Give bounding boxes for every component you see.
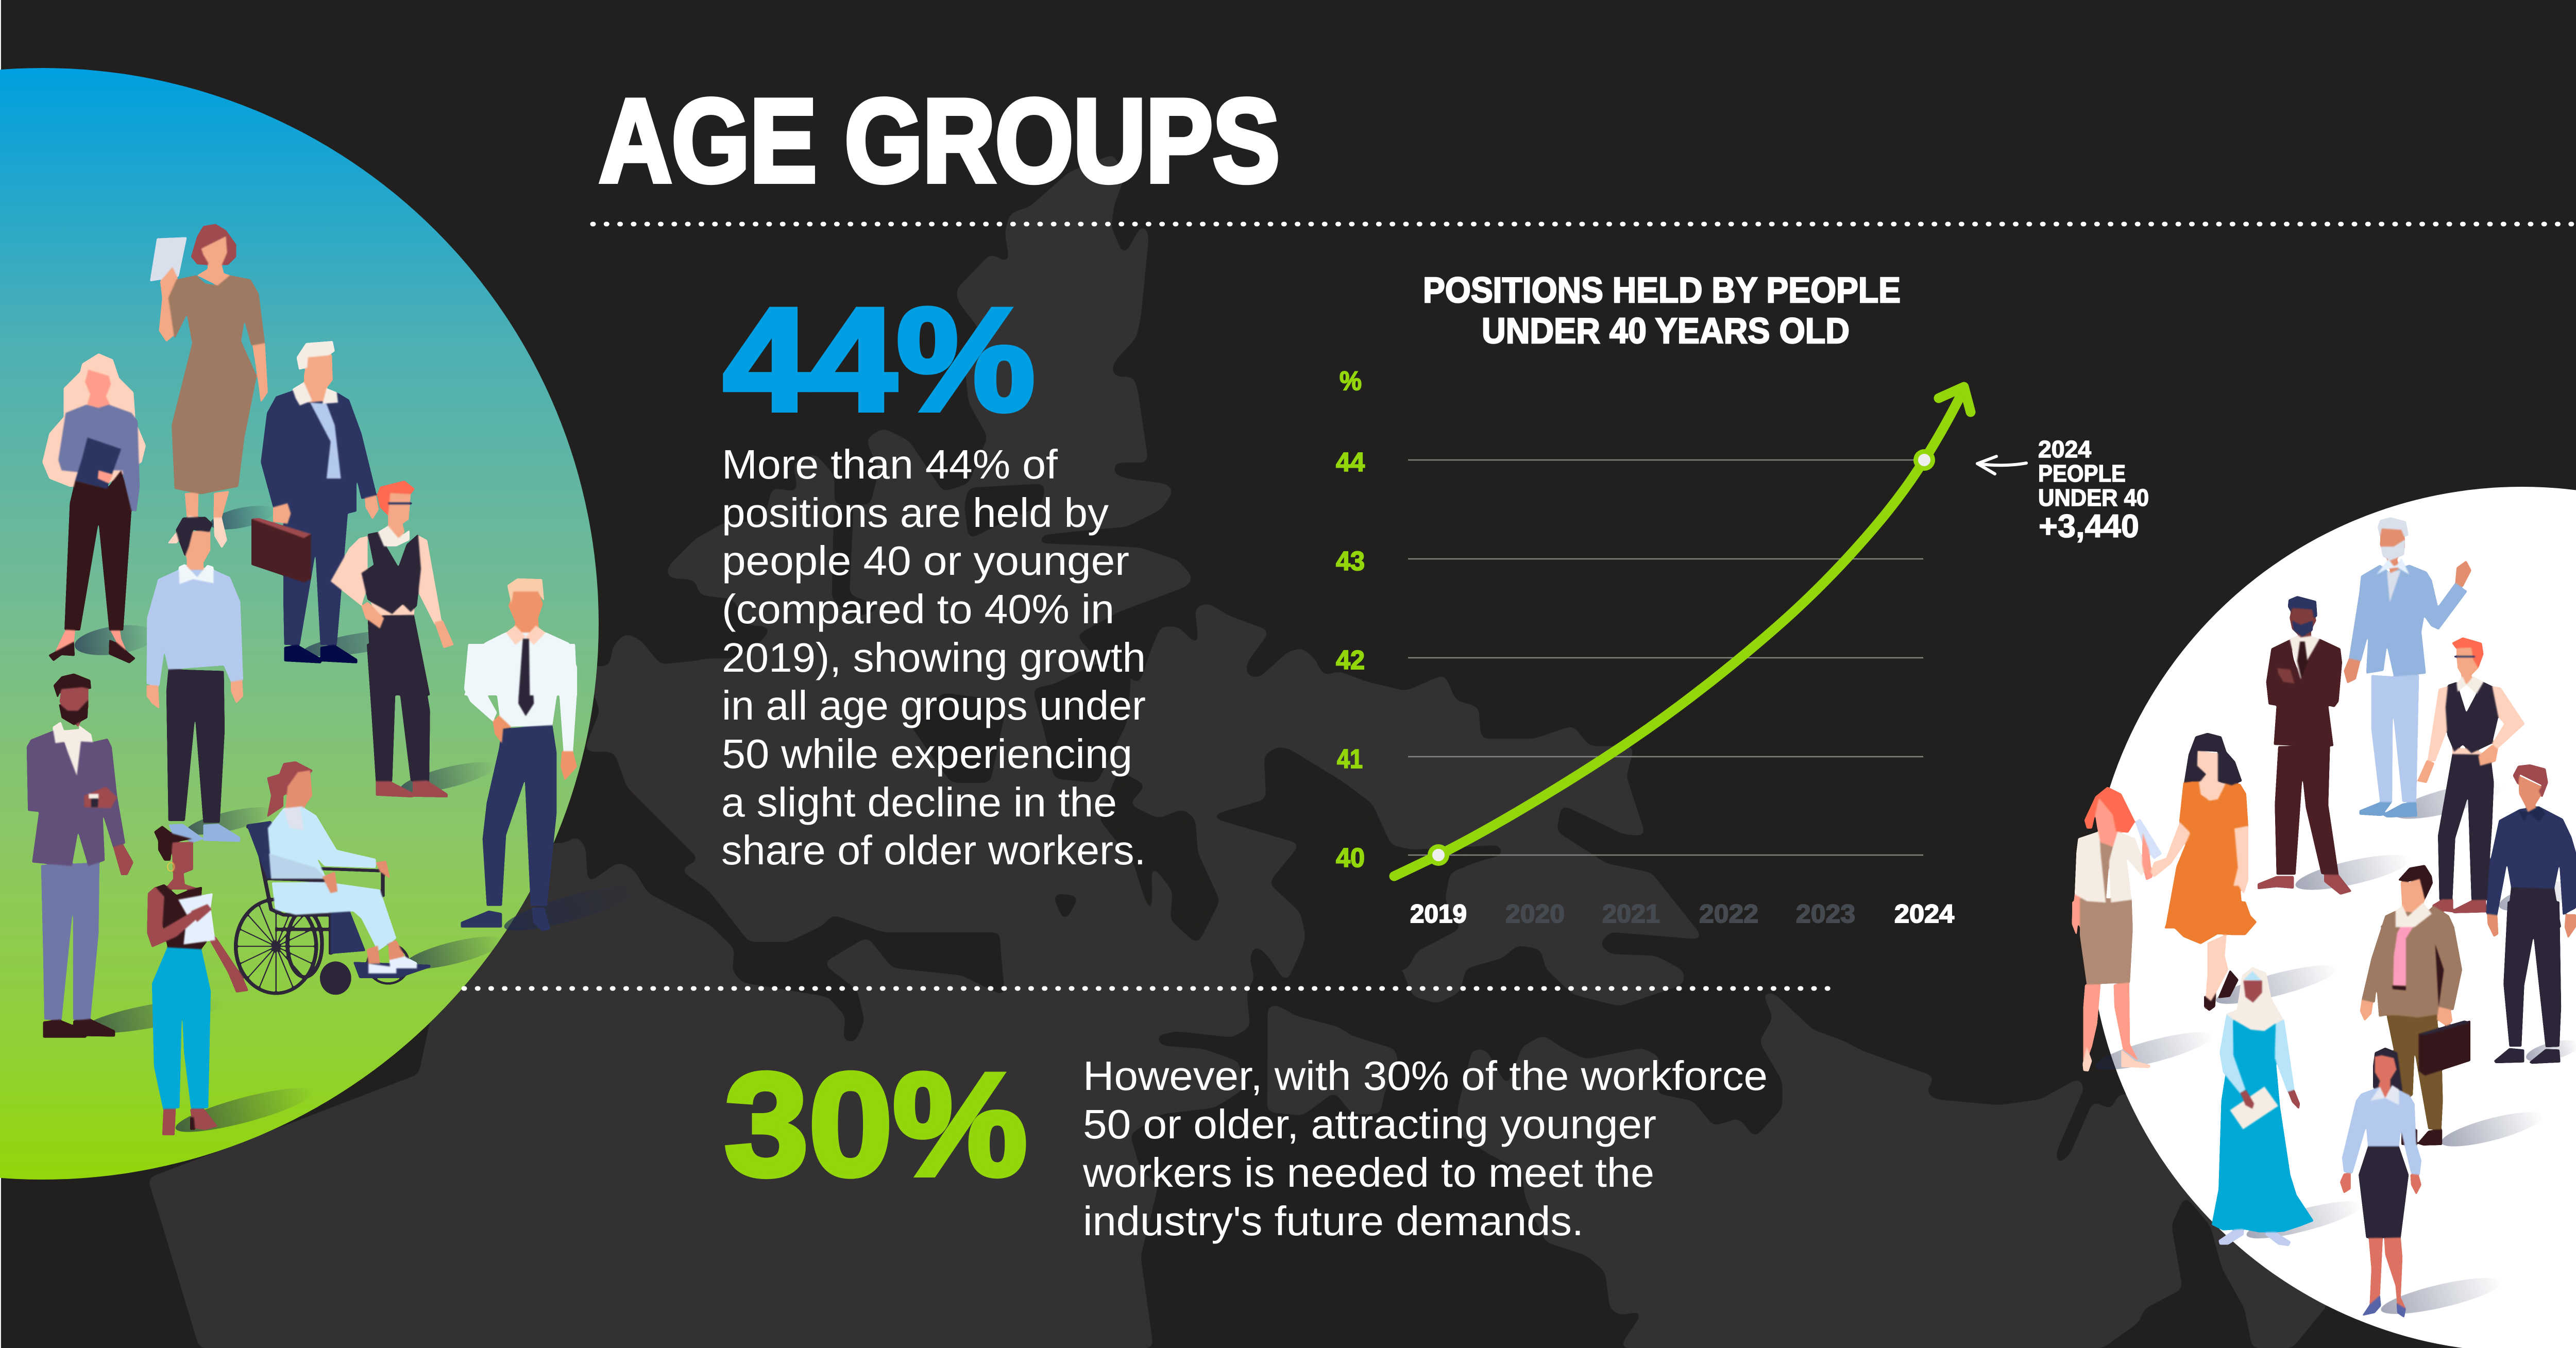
data point 2019 bbox=[1428, 844, 1449, 866]
right ground shadows bbox=[2091, 775, 2576, 1321]
figure: man in light blue sweater bbox=[147, 517, 243, 843]
gradient circle panel bbox=[0, 68, 599, 1180]
figure: blond man in white shirt and tie bbox=[461, 578, 577, 931]
figure: white-haired man in navy suit with briefcase bbox=[251, 341, 379, 663]
text block: 44% description: positions are held by bbox=[722, 490, 1109, 536]
text block: 30% description bbox=[1082, 1053, 1768, 1244]
figure: man in navy shirt bbox=[2486, 764, 2576, 1064]
chart title: UNDER 40 YEARS OLD bbox=[1482, 311, 1850, 351]
y axis labels: 42 bbox=[1336, 645, 1365, 675]
arrow to annotation bbox=[1977, 456, 2026, 474]
year labels: 2024 bbox=[1894, 899, 1954, 928]
text block: 44% description bbox=[721, 441, 1146, 873]
text block: 44% description: (compared to 40% in bbox=[722, 586, 1114, 632]
text block: 44% description: More than 44% of bbox=[722, 441, 1058, 487]
people group: left circle bbox=[27, 224, 577, 1135]
y axis labels: 41 bbox=[1337, 744, 1363, 774]
year labels: 2022 bbox=[1699, 899, 1758, 928]
figure: man in brown jacket with briefcase bbox=[2360, 865, 2470, 1146]
chart title: POSITIONS HELD BY PEOPLE bbox=[1423, 270, 1901, 310]
annotation: 2024 people under 40 bbox=[2038, 436, 2149, 544]
y axis labels: 40 bbox=[1336, 843, 1365, 873]
figure: woman in wheelchair bbox=[236, 761, 430, 995]
text block: 30% description: However, with 30% of the workforce bbox=[1083, 1053, 1768, 1099]
growth curve arrow bbox=[1394, 387, 1971, 876]
figure: blonde woman with folder bbox=[42, 353, 146, 663]
text block: 44% description: 2019), showing growth bbox=[722, 635, 1146, 680]
figure: woman in orange dress bbox=[2150, 733, 2257, 1011]
text block: 44% description: people 40 or younger bbox=[722, 538, 1129, 584]
left edge strip bbox=[0, 0, 1, 1348]
figure: red-haired man in vest bbox=[2417, 637, 2525, 913]
lower dotted divider bbox=[464, 986, 1832, 991]
figure: red-haired man in vest bbox=[331, 481, 454, 797]
figure: bearded man in purple suit bbox=[27, 674, 133, 1038]
figure: woman in hijab and blue dress bbox=[2212, 967, 2314, 1246]
y axis labels: % bbox=[1340, 366, 1362, 396]
people group: right circle bbox=[2072, 517, 2576, 1318]
title: AGE GROUPS bbox=[599, 75, 1280, 207]
left ground shadows bbox=[73, 501, 641, 1140]
figure: woman in brown dress with tablet bbox=[150, 224, 268, 549]
figure: woman in striped blouse and dark skirt bbox=[2340, 1048, 2421, 1318]
background map silhouette bbox=[148, 154, 2329, 1348]
stat: 44%: 44% bbox=[723, 278, 1035, 441]
grid lines bbox=[1408, 460, 1923, 855]
year labels: 2019 bbox=[1410, 899, 1467, 928]
annotation: 2024 people under 40: UNDER 40 bbox=[2038, 484, 2149, 511]
year labels: 2021 bbox=[1602, 899, 1660, 928]
year labels bbox=[1410, 899, 1954, 928]
annotation: 2024 people under 40: PEOPLE bbox=[2038, 460, 2126, 487]
text block: 44% description: a slight decline in the bbox=[721, 779, 1117, 825]
chart: positions held by people under 40 bbox=[1336, 270, 1971, 928]
y axis labels bbox=[1336, 366, 1365, 873]
annotation: 2024 people under 40: +3,440 bbox=[2039, 508, 2139, 544]
figure: grey-bearded man in light blue suit waving bbox=[2344, 517, 2471, 817]
text block: 30% description: 50 or older, attracting younger bbox=[1083, 1101, 1656, 1147]
chart title bbox=[1423, 270, 1901, 351]
white circle panel bbox=[2089, 487, 2576, 1348]
figure: woman in beige blazer bbox=[2072, 787, 2162, 1071]
figure: man in burgundy suit with blue beard bbox=[2258, 596, 2352, 895]
top dotted divider bbox=[592, 221, 2576, 227]
text block: 44% description: 50 while experiencing bbox=[722, 731, 1132, 777]
text block: 30% description: industry's future demands. bbox=[1083, 1198, 1584, 1244]
text block: 30% description: workers is needed to meet the bbox=[1082, 1150, 1654, 1196]
y axis labels: 43 bbox=[1336, 547, 1365, 576]
annotation: 2024 people under 40: 2024 bbox=[2038, 436, 2091, 463]
text block: 44% description: in all age groups under bbox=[722, 682, 1146, 728]
year labels: 2020 bbox=[1505, 899, 1565, 928]
figure: woman in teal trousers with papers bbox=[147, 826, 248, 1135]
y axis labels: 44 bbox=[1336, 448, 1365, 477]
year labels: 2023 bbox=[1796, 899, 1855, 928]
stat: 30%: 30% bbox=[724, 1043, 1027, 1206]
text block: 44% description: share of older workers. bbox=[721, 827, 1146, 873]
data point 2024 bbox=[1913, 449, 1935, 471]
